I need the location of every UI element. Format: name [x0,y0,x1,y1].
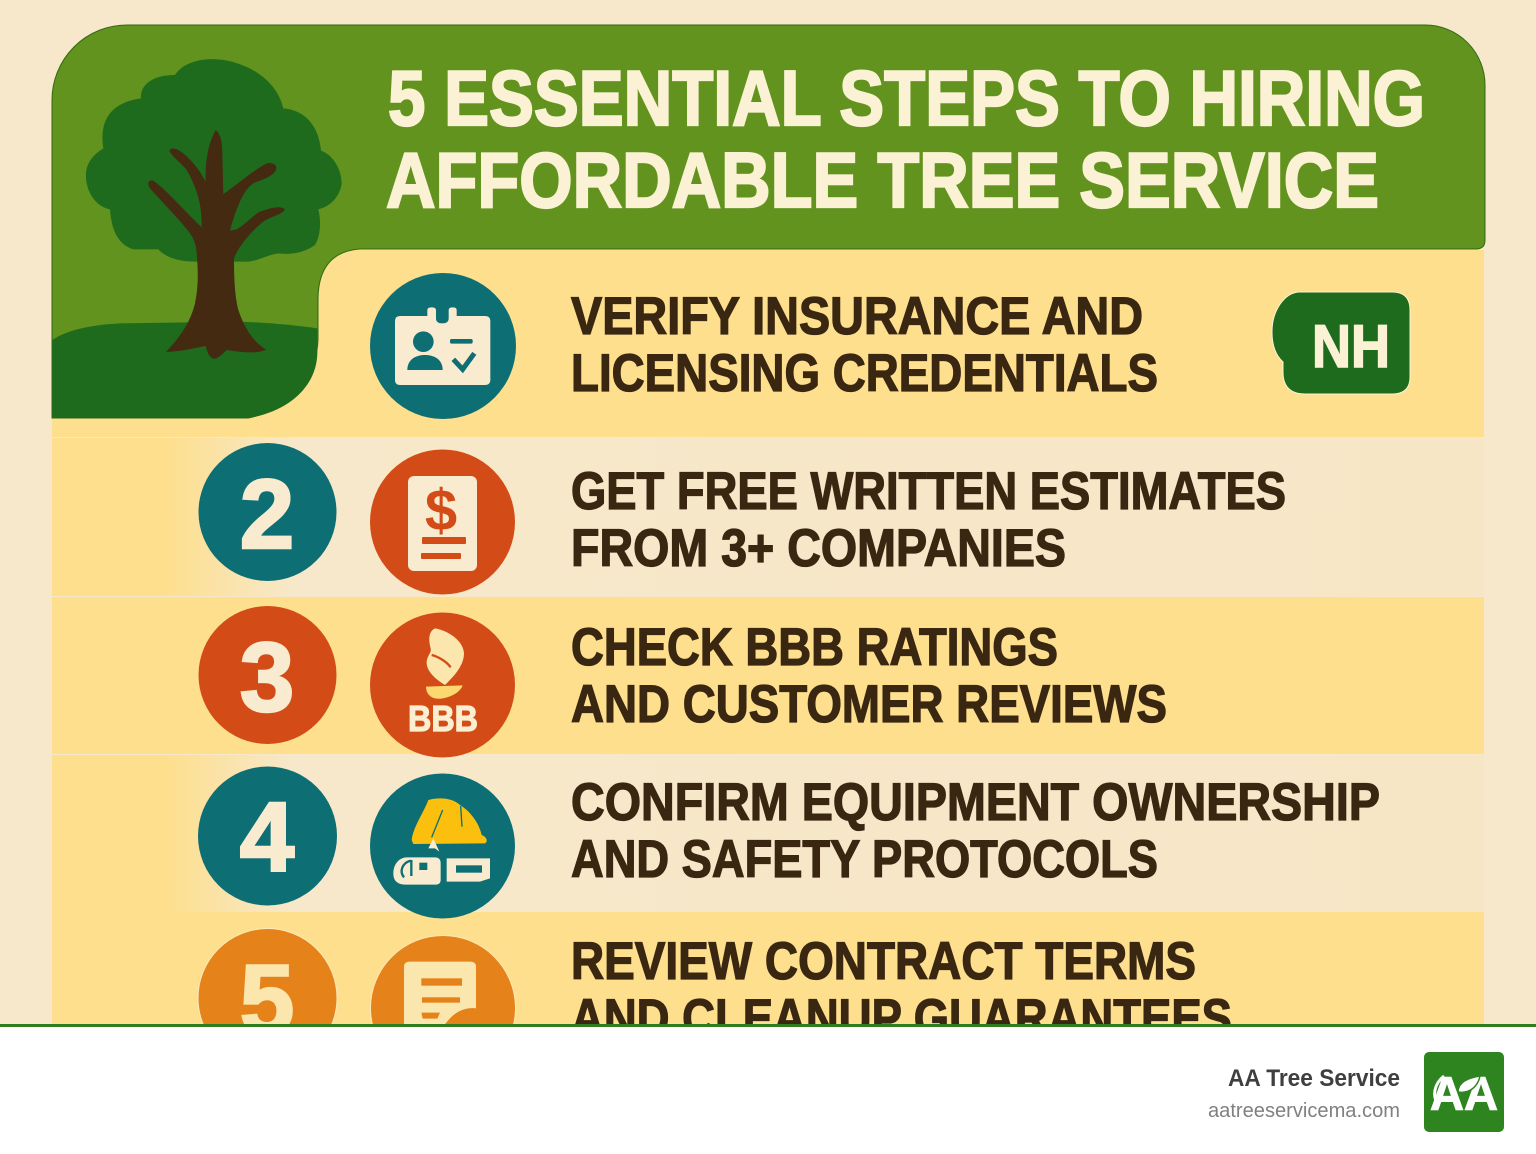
step 3 text [571,618,1167,734]
step 2 text: GET FREE WRITTEN ESTIMATES [571,462,1286,521]
step 4 number: 4 [240,782,294,892]
icon: written estimate: $ [425,478,457,543]
panel: step 4 row [52,755,1484,912]
panel: step 3 row [52,597,1484,754]
step 3 number: 3 [240,622,294,732]
step 2 text [571,462,1286,578]
panel: step 2 row [52,438,1484,596]
step 3 number [198,606,336,744]
step 3 text: AND CUSTOMER REVIEWS [571,675,1167,734]
company name and website: AA Tree Service [1228,1065,1400,1092]
step 4 number [198,766,337,906]
icon: contract document [370,936,516,1080]
icon: tree illustration [52,59,342,418]
logo: AA Tree Service: AA [1430,1067,1498,1120]
NH state badge [1272,292,1410,394]
title: AFFORDABLE TREE SERVICE [386,136,1379,224]
step 5 text [571,932,1232,1048]
icon: BBB torch: BBB [408,698,478,739]
logo: AA Tree Service [1424,1052,1504,1132]
step 1 text [571,287,1158,403]
icon: hard hat and chainsaw [370,774,515,918]
step 5 number: 5 [240,944,294,1054]
NH state badge: NH [1312,313,1390,380]
icon: BBB torch [370,612,515,758]
panel: step 5 row [52,912,1484,1026]
icon: credentials badge [370,273,516,419]
step 2 text: FROM 3+ COMPANIES [571,519,1066,578]
company name and website [1208,1065,1400,1122]
icon: written estimate [370,450,515,594]
step 5 text: AND CLEANUP GUARANTEES [571,989,1232,1048]
footer bar [0,1024,1536,1154]
step 4 text: CONFIRM EQUIPMENT OWNERSHIP [571,773,1380,832]
panel: step 1 row [52,250,1484,437]
step 2 number: 2 [240,459,294,569]
step 3 text: CHECK BBB RATINGS [571,618,1058,677]
company name and website: aatreeservicema.com [1208,1100,1400,1122]
step 4 text: AND SAFETY PROTOCOLS [571,830,1158,889]
step 5 text: REVIEW CONTRACT TERMS [571,932,1196,991]
panel: green header [52,25,1485,418]
step 4 text [571,773,1380,889]
step 5 number [198,928,337,1068]
step 2 number [198,443,336,581]
step 1 text: VERIFY INSURANCE AND [571,287,1143,346]
title [386,54,1425,224]
step 1 text: LICENSING CREDENTIALS [571,344,1158,403]
